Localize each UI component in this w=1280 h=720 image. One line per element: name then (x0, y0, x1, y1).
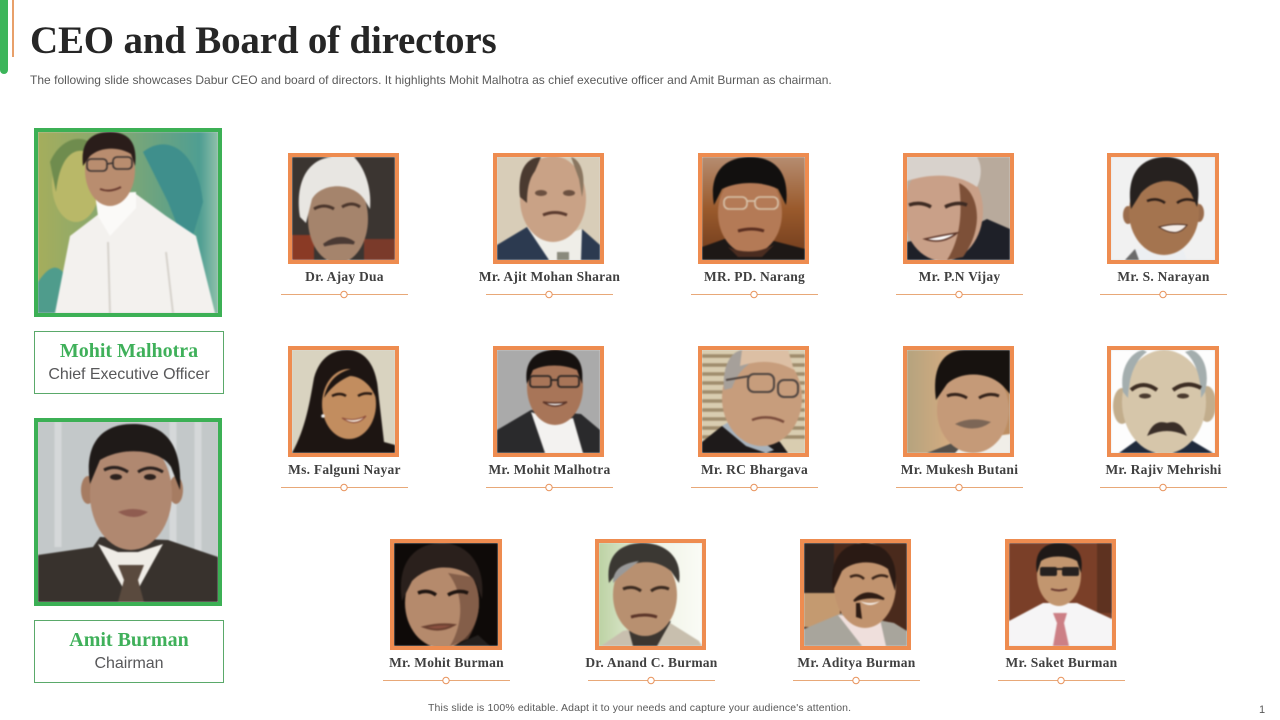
director: Mr. Aditya Burman (793, 539, 920, 684)
director: Mr. Rajiv Mehrishi (1100, 346, 1227, 492)
divider marker (896, 290, 1023, 298)
photo (903, 153, 1014, 264)
footer note: This slide is 100% editable. Adapt it to your needs and capture your audience's attention. (428, 702, 851, 714)
name: Ms. Falguni Nayar (288, 462, 401, 477)
photo (288, 346, 399, 457)
photo (493, 153, 604, 264)
title: CEO and Board of directors (30, 19, 496, 62)
photo (800, 539, 911, 650)
name: Dr. Ajay Dua (305, 269, 384, 284)
divider marker (486, 484, 613, 492)
photo (1107, 153, 1219, 264)
name: Mr. Rajiv Mehrishi (1105, 462, 1222, 477)
photo (493, 346, 604, 457)
director: Mr. Mohit Malhotra (486, 346, 613, 492)
photo: Mohit Malhotra CEO (34, 128, 222, 317)
name: Amit Burman (69, 629, 189, 651)
name: MR. PD. Narang (704, 269, 805, 284)
accent bars (0, 0, 14, 74)
name box: Amit Burman (34, 620, 224, 683)
director: Mr. Saket Burman (998, 539, 1125, 684)
director: MR. PD. Narang (691, 153, 818, 298)
photo: Amit Burman chairman (34, 418, 222, 606)
role: Chief Executive Officer (48, 366, 210, 383)
name: Mohit Malhotra (60, 340, 198, 362)
director: Dr. Ajay Dua (281, 153, 408, 298)
photo (1005, 539, 1116, 650)
divider marker (691, 290, 818, 298)
divider marker (691, 484, 818, 492)
divider marker (281, 484, 408, 492)
director: Mr. Mukesh Butani (896, 346, 1023, 492)
photo (1107, 346, 1219, 457)
name box: Mohit Malhotra (34, 331, 224, 394)
divider marker (281, 290, 408, 298)
divider marker (588, 676, 715, 684)
name: Dr. Anand C. Burman (585, 655, 718, 670)
photo (390, 539, 502, 650)
divider marker (896, 484, 1023, 492)
divider marker (486, 290, 613, 298)
name: Mr. S. Narayan (1117, 269, 1210, 284)
director: Mr. P.N Vijay (896, 153, 1023, 298)
divider marker (1100, 290, 1227, 298)
director: Mr. Ajit Mohan Sharan (479, 153, 620, 298)
director: Dr. Anand C. Burman (585, 539, 718, 684)
name: Mr. Mohit Burman (389, 655, 504, 670)
photo (698, 346, 809, 457)
page number: 1 (1259, 704, 1265, 716)
director: Mr. S. Narayan (1100, 153, 1227, 298)
name: Mr. P.N Vijay (919, 269, 1000, 284)
name: Mr. RC Bhargava (701, 462, 808, 477)
divider marker (383, 676, 510, 684)
name: Mr. Mohit Malhotra (488, 462, 611, 477)
director: Mr. Mohit Burman (383, 539, 510, 684)
director: Mr. RC Bhargava (691, 346, 818, 492)
divider marker (1100, 484, 1227, 492)
role: Chairman (95, 655, 163, 672)
photo (698, 153, 809, 264)
name: Mr. Saket Burman (1006, 655, 1117, 670)
subtitle: The following slide showcases Dabur CEO and board of directors. It highlights Mohit Malhotra as chief executive officer and Amit Burman as chairman. (30, 73, 832, 87)
photo (595, 539, 706, 650)
photo (903, 346, 1014, 457)
name: Mr. Aditya Burman (797, 655, 916, 670)
director: Ms. Falguni Nayar (281, 346, 408, 492)
divider marker (793, 676, 920, 684)
photo (288, 153, 399, 264)
divider marker (998, 676, 1125, 684)
name: Mr. Mukesh Butani (901, 462, 1018, 477)
name: Mr. Ajit Mohan Sharan (479, 269, 620, 284)
